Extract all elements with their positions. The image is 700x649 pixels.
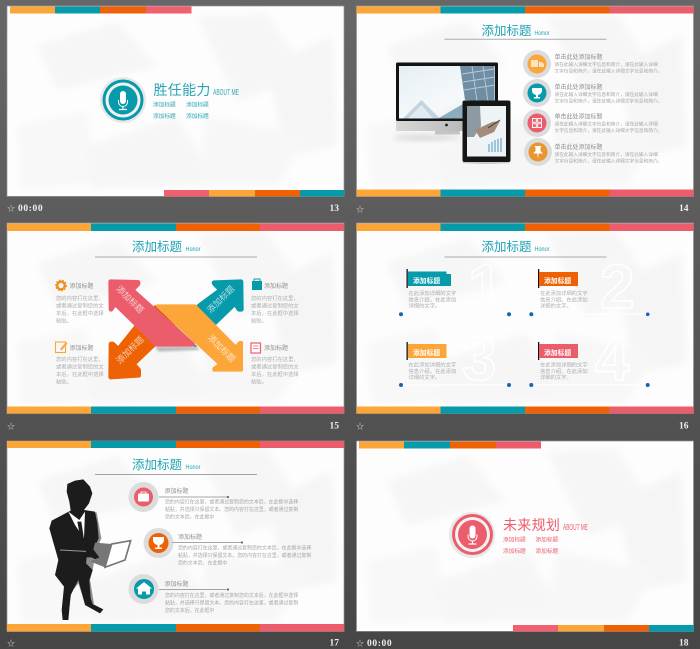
item: gear top left xyxy=(56,280,104,324)
bottom colour strip xyxy=(356,190,694,196)
footer: ☆ xyxy=(7,639,15,648)
block 4: 在此添加详细的文字 xyxy=(540,360,588,368)
item: note bottom right: 粘贴。 xyxy=(251,378,267,386)
item: bag top right: 添加标题 xyxy=(264,282,288,290)
footer xyxy=(356,638,689,649)
list item: trophy xyxy=(523,79,662,107)
block 2: 详细的文字。 xyxy=(540,302,572,310)
slide 17: businessman with list xyxy=(7,441,344,648)
footer: 14 xyxy=(679,204,689,214)
item: gear top left: 或者通过复制您的文 xyxy=(56,302,104,310)
footer: ☆ xyxy=(7,204,15,213)
block 1 xyxy=(406,269,456,310)
monitor image xyxy=(393,62,498,140)
list item: home: 添加标题 xyxy=(164,580,189,588)
sub-items: 添加标题 xyxy=(186,112,209,120)
list item: briefcase: 您的文本后，在此框中 xyxy=(165,514,214,520)
arrow diagram xyxy=(111,282,241,377)
title suffix: Homor xyxy=(534,30,550,37)
item: note bottom right: 或者通过复制您的文 xyxy=(251,362,299,370)
businessman silhouette xyxy=(49,479,131,620)
footer xyxy=(7,422,339,432)
title rule xyxy=(95,473,257,476)
item: gear top left: 添加标题 xyxy=(70,282,94,290)
bottom colour strip xyxy=(356,406,694,414)
list item: home: 您的文本后，在此框中 xyxy=(165,607,214,614)
outlined numbers: 3 xyxy=(462,325,496,394)
outlined numbers: 4 xyxy=(595,325,630,394)
footer: ☆ xyxy=(356,205,364,214)
item: edit bottom left: 或者通过复制您的文 xyxy=(56,362,104,370)
block 2: 在此添加详细的文字 xyxy=(540,289,588,297)
heading suffix: ABOUT ME xyxy=(213,88,239,97)
block 1: 添加标题 xyxy=(413,276,440,285)
footer: 00:00 xyxy=(367,639,392,649)
top colour strip xyxy=(356,6,694,14)
block 4: 详细的文字。 xyxy=(540,373,572,381)
heading: 胜任能力 xyxy=(154,82,211,98)
list item: trophy: 您的文本后，在此框中 xyxy=(178,560,227,566)
arrow: teal: 添加标题 xyxy=(204,283,237,315)
heading suffix: ABOUT ME xyxy=(563,523,588,532)
block 3: 信息介绍。在此添加 xyxy=(408,367,456,375)
title suffix: Honor xyxy=(186,246,201,253)
item: bag top right: 您的内容打在这里， xyxy=(251,294,299,302)
arrow: orange: 添加标题 xyxy=(114,333,146,366)
title suffix: Honor xyxy=(186,464,201,471)
list item: trophy: 单击此处添加标题 xyxy=(554,83,603,91)
sub-items: 添加标题 xyxy=(536,536,559,544)
list item: briefcase: 粘贴，并选择只保留文本。您的内容打在这里，或者通过复制 xyxy=(165,506,298,513)
sub-items xyxy=(503,536,559,555)
list item: briefcase: 添加标题 xyxy=(164,487,189,495)
title rule xyxy=(444,38,606,41)
title rule xyxy=(444,256,606,258)
slide 14: product devices list xyxy=(356,6,694,214)
list item: grid: 请在此输入详细文字信息和简介，请在此输入详细 xyxy=(554,120,658,128)
block 1: 在此添加详细的文字 xyxy=(408,289,456,297)
bottom colour strip xyxy=(7,624,344,632)
item: edit bottom left: 添加标题 xyxy=(70,344,94,352)
item: edit bottom left: 您的内容打在这里， xyxy=(56,355,104,363)
list item: trophy: 粘贴，并选择只保留文本。您的内容打在这里，或者通过复制 xyxy=(178,552,311,559)
title: 添加标题 xyxy=(482,240,532,254)
sub-items: 添加标题 xyxy=(536,547,559,555)
arrow: pink: 添加标题 xyxy=(114,283,147,315)
top colour strip xyxy=(7,224,344,231)
list item: home xyxy=(128,574,298,614)
title: 添加标题 xyxy=(482,24,532,38)
block 4 xyxy=(538,342,588,381)
item: bag top right: 或者通过复制您的文 xyxy=(251,302,299,310)
tablet image xyxy=(462,100,510,164)
item: edit bottom left: 粘贴。 xyxy=(56,378,72,386)
item: bag top right: 本后，在此框中选择 xyxy=(251,309,299,317)
list item: trophy xyxy=(144,528,311,566)
item: edit bottom left: 本后，在此框中选择 xyxy=(56,370,104,378)
baselines xyxy=(401,314,648,385)
outlined numbers: 1 xyxy=(468,253,502,322)
list item: trophy: 您的内容打在这里，或者通过复制您的文本后，在此框中选择 xyxy=(178,544,311,552)
footer xyxy=(7,204,339,214)
item: gear top left: 您的内容打在这里， xyxy=(56,294,104,302)
item: note bottom right: 您的内容打在这里， xyxy=(251,355,299,363)
bottom colour strip xyxy=(164,190,344,196)
list item: briefcase xyxy=(128,482,298,520)
list item: trophy: 添加标题 xyxy=(178,533,202,541)
title: 添加标题 xyxy=(132,240,183,254)
list item: pin: 单击此处添加标题 xyxy=(554,143,603,151)
top colour strip xyxy=(356,224,694,231)
title suffix: Honor xyxy=(534,246,550,253)
list item: home: 粘贴，并选择只保留文本。您的内容打在这里，或者通过复制 xyxy=(165,600,298,606)
item: note bottom right: 添加标题 xyxy=(264,344,288,352)
footer: 18 xyxy=(679,638,689,648)
block 3 xyxy=(406,342,456,381)
item: bag top right: 粘贴。 xyxy=(251,316,267,324)
outlined numbers xyxy=(462,253,634,394)
list item: trophy: 请在此输入详细文字信息和简介，请在此输入详细 xyxy=(554,91,658,98)
list item: truck: 单击此处添加标题 xyxy=(554,53,603,61)
block 2 xyxy=(538,269,588,310)
list item: grid: 单击此处添加标题 xyxy=(554,112,603,120)
footer: 15 xyxy=(330,422,339,432)
list item: truck: 请在此输入详细文字信息和简介，请在此输入详细 xyxy=(554,61,658,68)
item: edit bottom left xyxy=(56,342,104,386)
icon: microphone badge xyxy=(449,512,495,558)
top colour strip xyxy=(7,441,344,448)
list item: grid xyxy=(523,109,662,137)
list item: pin: 文字信息和简介，请在此输入详细文字信息和简介。 xyxy=(554,158,662,164)
bottom colour strip xyxy=(513,625,694,632)
block 4: 添加标题 xyxy=(544,348,571,357)
slide 18: section title xyxy=(356,441,694,649)
item: note bottom right xyxy=(251,343,299,386)
sub-items: 添加标题 xyxy=(503,536,526,544)
footer: 16 xyxy=(679,422,689,432)
footer: 13 xyxy=(330,204,339,214)
item: bag top right xyxy=(251,279,299,324)
top colour strip xyxy=(359,442,541,448)
list item: home: 您的内容打在这里，或者通过复制您的文本后，在此框中选择 xyxy=(165,592,298,599)
block 3: 详细的文字。 xyxy=(408,373,440,381)
icon: microphone badge xyxy=(100,77,146,123)
slivers at the centre crossing xyxy=(153,305,197,347)
block 1: 信息介绍。在此添加 xyxy=(408,296,456,304)
item: note bottom right: 本后，在此框中选择 xyxy=(251,370,299,378)
slide 16: four numbered blocks xyxy=(356,223,694,432)
item: gear top left: 本后，在此框中选择 xyxy=(56,309,104,317)
footer: ☆ xyxy=(7,422,15,431)
footer xyxy=(356,204,689,214)
sub-items: 添加标题 xyxy=(153,112,176,120)
block 1: 详细的文字。 xyxy=(408,302,440,310)
sub-items xyxy=(153,100,209,120)
footer: 00:00 xyxy=(18,204,43,214)
footer xyxy=(356,422,689,432)
footer: 17 xyxy=(330,638,339,648)
list item: briefcase: 您的内容打在这里，或者通过复制您的文本后，在此框中选择 xyxy=(165,498,298,506)
list item: truck: 文字信息和简介，请在此输入详细文字信息和简介。 xyxy=(554,68,662,74)
footer xyxy=(7,638,339,648)
list item: truck xyxy=(523,50,662,78)
slide 13: section title xyxy=(7,6,344,214)
block 2: 添加标题 xyxy=(544,276,571,285)
title: 添加标题 xyxy=(132,458,183,472)
sub-items: 添加标题 xyxy=(186,100,209,108)
sub-items: 添加标题 xyxy=(503,547,526,555)
list item: pin: 请在此输入详细文字信息和简介，请在此输入详细 xyxy=(554,151,658,158)
item: gear top left: 粘贴。 xyxy=(56,316,72,324)
outlined numbers: 2 xyxy=(600,253,634,322)
block 3: 添加标题 xyxy=(413,348,440,357)
arrow: yellow: 添加标题 xyxy=(206,332,238,364)
bottom colour strip xyxy=(7,406,344,414)
blue dots xyxy=(399,312,650,387)
block 2: 信息介绍。在此添加 xyxy=(540,296,588,304)
sub-items: 添加标题 xyxy=(153,100,176,108)
footer: ☆ xyxy=(356,639,364,648)
heading: 未来规划 xyxy=(503,517,560,533)
block 3: 在此添加详细的文字 xyxy=(408,360,456,368)
footer: ☆ xyxy=(356,422,364,431)
block 4: 信息介绍。在此添加 xyxy=(540,367,588,375)
list item: grid: 文字信息和简介，请在此输入详细文字信息和简介。 xyxy=(554,127,662,134)
list item: pin xyxy=(524,138,662,166)
top colour strip xyxy=(10,6,192,14)
slide 15: four arrows xyxy=(7,223,344,432)
list item: trophy: 文字信息和简介，请在此输入详细文字信息和简介。 xyxy=(554,98,662,104)
title rule xyxy=(95,256,257,258)
